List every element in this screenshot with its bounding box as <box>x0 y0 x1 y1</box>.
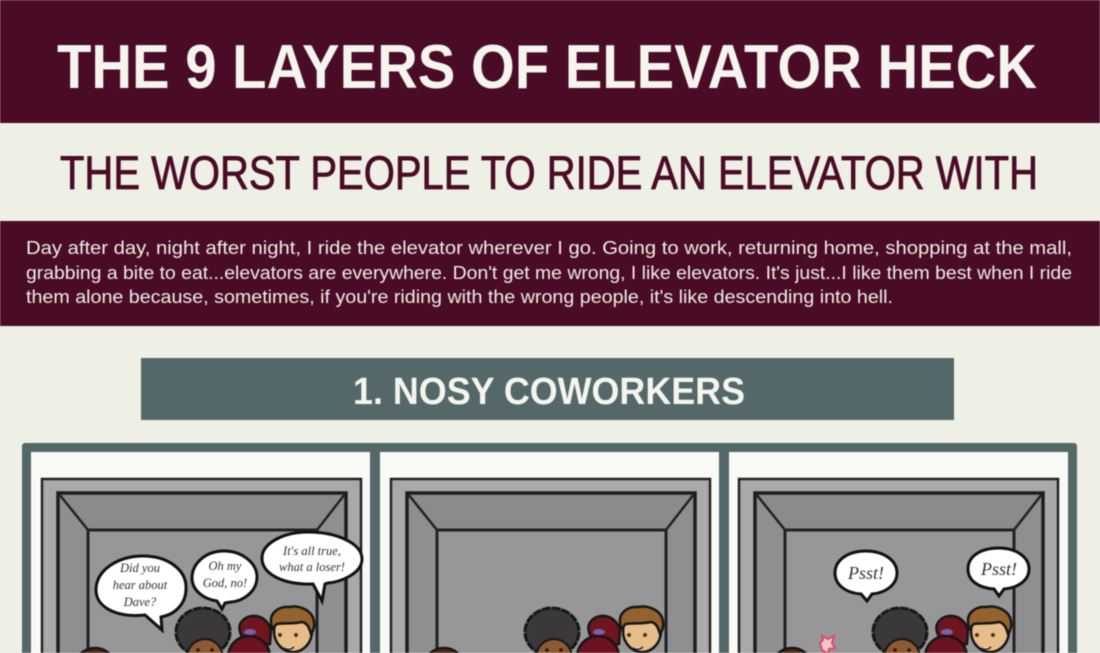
intro text <box>26 238 1072 307</box>
intro panel <box>0 221 1100 326</box>
elevator interior 3 <box>739 479 1058 653</box>
speech bubble: psst left <box>835 551 897 601</box>
panel 3 <box>729 452 1068 653</box>
coworkers 1 <box>77 607 314 653</box>
speech bubble: did you hear: hear about <box>113 578 168 592</box>
comic strip frame <box>22 443 1077 653</box>
icon: pink anger mark <box>820 636 835 653</box>
speech bubble: psst right: Psst! <box>980 559 1017 579</box>
intro text: them alone because, sometimes, if you're riding with the wrong people, it's like descending into hell. <box>26 287 893 307</box>
speech bubble: oh my god: Oh my <box>209 559 242 573</box>
intro text: grabbing a bite to eat...elevators are everywhere. Don't get me wrong, I like elevators. It's just...I like them best when I ride <box>26 263 1072 283</box>
title band <box>0 0 1100 123</box>
speech bubble: psst left: Psst! <box>847 563 884 583</box>
coworkers 3 <box>774 607 1011 653</box>
section banner: nosy coworkers <box>141 358 954 420</box>
speech bubble: did you hear: Dave? <box>123 595 157 609</box>
coworkers 2 <box>426 607 663 653</box>
speech bubble: it's all true <box>262 532 362 601</box>
panel 1 <box>31 452 370 653</box>
speech bubble: oh my god <box>192 551 257 609</box>
speech bubble: psst right <box>968 548 1029 596</box>
speech bubble: oh my god: God, no! <box>203 576 247 590</box>
elevator interior 1 <box>42 479 361 653</box>
section heading: 1. NOSY COWORKERS <box>353 371 745 413</box>
speech bubble: it's all true: what a loser! <box>279 560 345 574</box>
panel 2 <box>380 452 719 653</box>
speech bubble: it's all true: It's all true, <box>282 544 341 558</box>
elevator interior 2 <box>391 479 710 653</box>
speech bubble: did you hear: Did you <box>119 561 160 575</box>
speech bubble: did you hear <box>96 556 186 630</box>
intro text: Day after day, night after night, I ride the elevator wherever I go. Going to work, returning home, shopping at the mall, <box>26 238 1072 258</box>
